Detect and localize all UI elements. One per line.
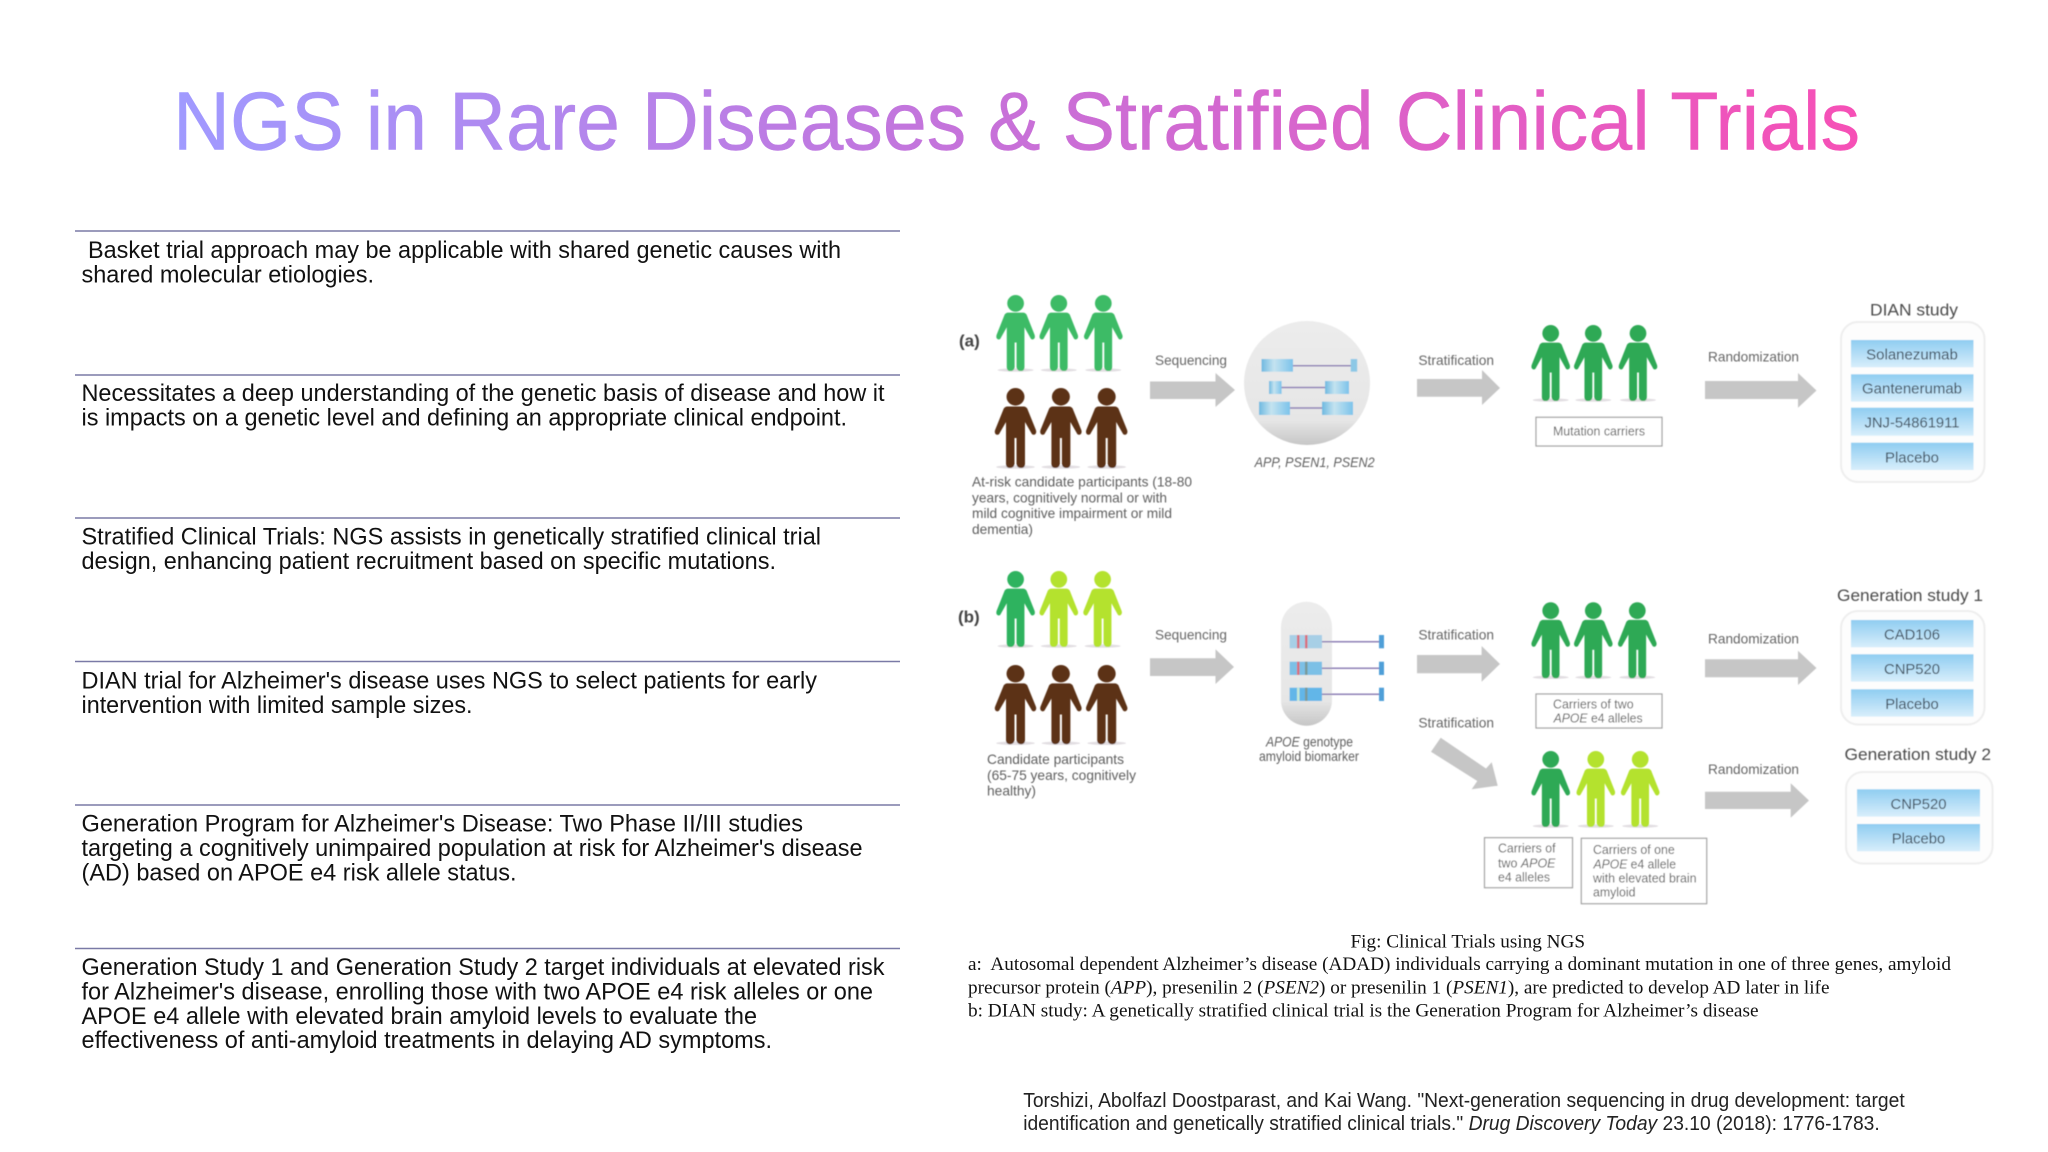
icon: carriers of two alleles	[1531, 602, 1657, 679]
figure caption: b: DIAN study: A genetically stratified clinical trial is the Generation Program for Alzheimer’s disease	[968, 1000, 1758, 1022]
icon: mixed carriers	[1531, 751, 1660, 828]
text block: genetic basis	[82, 380, 885, 432]
icon: green at-risk participants	[996, 295, 1123, 372]
label box: carriers of two alleles lower: Carriers of	[1498, 841, 1556, 856]
panel: generation study 1 arms: CAD106	[1884, 627, 1940, 643]
label: randomization lower: Randomization	[1708, 761, 1799, 777]
panel b	[958, 571, 1992, 904]
caption a: At-risk candidate participants (18-80	[972, 474, 1192, 490]
caption a: years, cognitively normal or with	[972, 490, 1167, 506]
label a: (a)	[959, 332, 980, 350]
arrow: stratification	[1417, 370, 1500, 405]
text block: basket trial: Basket trial approach may be applicable with shared genetic causes with	[88, 237, 841, 264]
text block: generation program: targeting a cognitively unimpaired population at risk for Alzheimer's disease	[82, 835, 862, 862]
label: sequencing: Sequencing	[1155, 352, 1227, 368]
arrow: randomization upper	[1705, 651, 1816, 685]
panel: DIAN arms: Gantenerumab	[1862, 381, 1962, 397]
text block: generation studies: APOE e4 allele with elevated brain amyloid levels to evaluate the	[82, 1003, 757, 1030]
label box: carriers of two alleles lower: e4 alleles	[1498, 870, 1550, 885]
label box: carriers of one allele: amyloid	[1593, 885, 1636, 900]
label: genes: APP, PSEN1, PSEN2	[1254, 454, 1375, 470]
figure: clinical trial flow diagram	[958, 295, 1992, 904]
label: stratification lower: Stratification	[1418, 714, 1494, 730]
text block: stratified clinical trials: design, enhancing patient recruitment based on specific mutations.	[82, 548, 776, 575]
panel: DIAN arms	[1841, 322, 1984, 482]
heading: generation study 2: Generation study 2	[1844, 745, 1991, 764]
arrow: stratification upper	[1417, 646, 1500, 682]
caption b: Candidate participants	[987, 751, 1124, 767]
heading: generation study 1: Generation study 1	[1837, 586, 1983, 605]
text block: DIAN trial	[82, 668, 817, 719]
label box: mutation carriers: Mutation carriers	[1553, 424, 1645, 439]
text block: generation studies: effectiveness of anti-amyloid treatments in delaying AD symptoms.	[82, 1027, 772, 1054]
label: APOE genotype	[1259, 734, 1359, 764]
label box: carriers of one allele: with elevated brain	[1592, 871, 1697, 886]
panel: generation study 2 arms	[1846, 772, 1992, 864]
caption b: healthy)	[987, 783, 1036, 799]
figure caption: Fig: Clinical Trials using NGS	[1350, 931, 1585, 952]
label box: carriers of two alleles: Carriers of two	[1553, 696, 1634, 711]
icon: sequencing disc with genes	[1244, 321, 1370, 445]
label: randomization upper: Randomization	[1708, 630, 1799, 646]
caption a: mild cognitive impairment or mild	[972, 505, 1172, 521]
label: randomization: Randomization	[1708, 349, 1799, 365]
arrow: sequencing	[1150, 373, 1235, 407]
label box: carriers of two alleles lower	[1484, 838, 1572, 888]
label: APOE genotype: amyloid biomarker	[1259, 748, 1359, 764]
text block: stratified clinical trials	[82, 524, 821, 575]
label: APOE genotype: APOE genotype	[1265, 734, 1353, 750]
text block: basket trial	[82, 237, 841, 288]
heading: DIAN study: DIAN study	[1870, 301, 1958, 320]
arrow: sequencing	[1150, 649, 1234, 684]
panel: generation study 1 arms: CNP520	[1884, 662, 1940, 678]
arrow: randomization lower	[1705, 783, 1809, 818]
label box: carriers of two alleles lower: two APOE	[1498, 855, 1556, 870]
label box: carriers of two alleles: APOE e4 alleles	[1553, 711, 1643, 726]
text block: generation program: (AD) based on APOE e4 risk allele status.	[82, 860, 516, 886]
text block: genetic basis: Necessitates a deep understanding of the genetic basis of disease and how it	[82, 380, 885, 407]
label box: mutation carriers	[1536, 417, 1662, 446]
figure caption	[968, 931, 1952, 1022]
text block: generation studies: for Alzheimer's disease, enrolling those with two APOE e4 risk alleles or one	[82, 978, 873, 1006]
figure caption: a: Autosomal dependent Alzheimer’s disease (ADAD) individuals carrying a dominant mutation in one of three genes, amyloid	[968, 954, 1952, 975]
text block: generation program: Generation Program for Alzheimer's Disease: Two Phase II/III studies	[82, 810, 803, 838]
label: stratification: Stratification	[1418, 352, 1494, 368]
label box: carriers of one allele: Carriers of one	[1593, 842, 1675, 857]
arrow: stratification diagonal	[1431, 738, 1498, 789]
icon: APOE capsule	[1281, 602, 1384, 726]
citation	[1023, 1090, 1905, 1135]
text block: generation program	[82, 810, 862, 886]
icon: brown at-risk participants	[995, 388, 1127, 469]
label box: carriers of one allele: APOE e4 allele	[1593, 856, 1676, 871]
citation: Torshizi, Abolfazl Doostparast, and Kai Wang. "Next-generation sequencing in drug development: target	[1023, 1090, 1905, 1112]
caption a: dementia)	[972, 521, 1033, 537]
arrow: randomization	[1705, 373, 1816, 408]
label box: carriers of two alleles	[1536, 694, 1662, 728]
citation: identification and genetically stratified clinical trials." Drug Discovery Today 23.10 (2018): 1776-1783.	[1023, 1113, 1880, 1135]
panel: generation study 1 arms	[1841, 611, 1984, 724]
panel: DIAN arms: JNJ-54861911	[1864, 415, 1960, 431]
panel: key points list	[75, 231, 900, 1054]
label: stratification upper: Stratification	[1418, 626, 1494, 642]
panel: DIAN arms: Solanezumab	[1866, 347, 1958, 363]
label b: (b)	[958, 608, 980, 627]
label box: carriers of one allele	[1581, 838, 1707, 904]
caption b	[987, 751, 1136, 799]
panel: generation study 2 arms: CNP520	[1890, 797, 1946, 813]
title: NGS in Rare Diseases & Stratified Clinical Trials	[173, 74, 1860, 168]
icon: mutation carriers	[1531, 325, 1657, 402]
panel: generation study 2 arms: Placebo	[1892, 831, 1945, 847]
icon: brown candidate participants	[995, 665, 1127, 745]
text block: genetic basis: is impacts on a genetic level and defining an appropriate clinical endpoint.	[82, 404, 847, 432]
icon: green candidate participants	[996, 571, 1122, 648]
figure caption: precursor protein (APP), presenilin 2 (PSEN2) or presenilin 1 (PSEN1), are predicted to develop AD later in life	[968, 978, 1829, 998]
text block: DIAN trial: DIAN trial for Alzheimer's disease uses NGS to select patients for early	[82, 668, 817, 694]
text block: basket trial: shared molecular etiologies.	[82, 262, 374, 288]
panel: generation study 1 arms: Placebo	[1885, 697, 1939, 713]
panel a	[959, 295, 1984, 537]
text block: stratified clinical trials: Stratified Clinical Trials: NGS assists in genetically stratified clinical trial	[82, 524, 821, 550]
caption a	[972, 474, 1192, 537]
panel: DIAN arms: Placebo	[1885, 450, 1939, 466]
label: sequencing: Sequencing	[1155, 626, 1227, 642]
text block: generation studies	[82, 954, 885, 1054]
text block: DIAN trial: intervention with limited sample sizes.	[82, 692, 472, 719]
text block: generation studies: Generation Study 1 and Generation Study 2 target individuals at elevated risk	[82, 954, 885, 981]
caption b: (65-75 years, cognitively	[987, 767, 1136, 783]
